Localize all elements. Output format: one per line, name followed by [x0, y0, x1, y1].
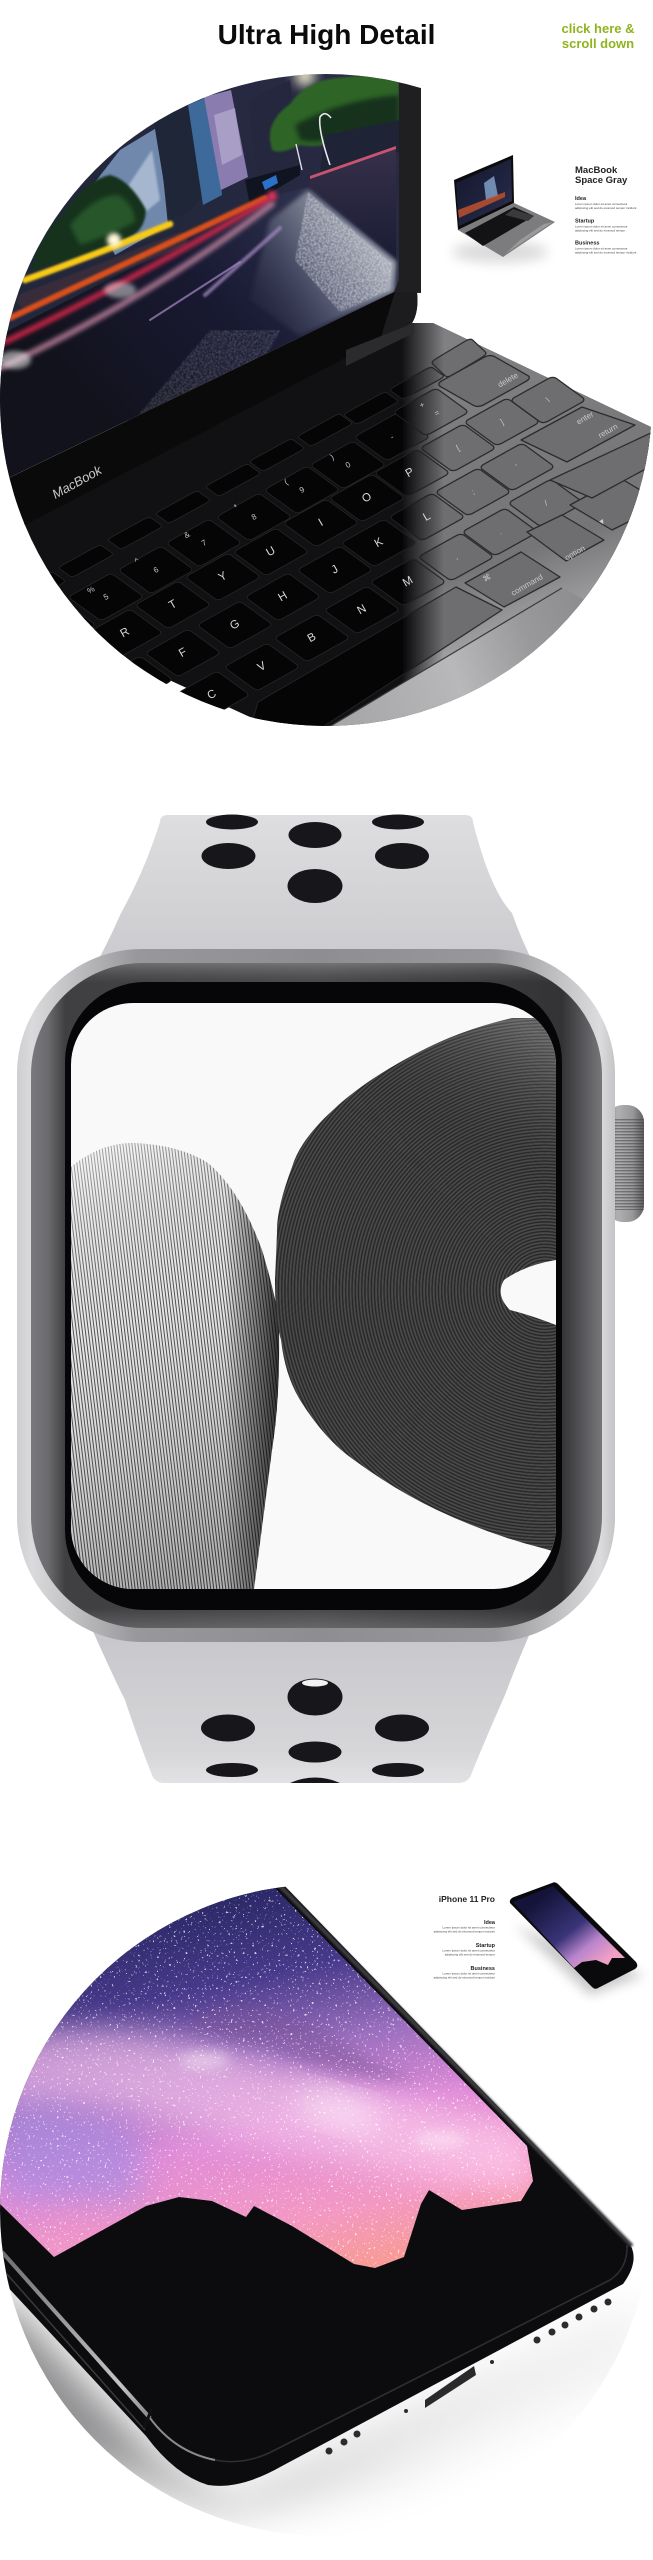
key labels: C [205, 688, 219, 702]
key labels: K [373, 536, 386, 550]
thumbnail phone body [510, 1882, 637, 1989]
key labels [86, 370, 619, 702]
watch screen [60, 1003, 560, 1600]
key labels: 9 [298, 485, 307, 495]
key labels: ] [499, 418, 505, 426]
feature: Startup [442, 1943, 496, 1956]
feature: Business [575, 240, 637, 254]
key labels: , [453, 553, 459, 561]
top strap [84, 814, 545, 985]
MacBook logo: MacBook [49, 462, 105, 502]
key labels: / [543, 498, 550, 507]
watch case outer [17, 949, 615, 1642]
key labels: % [86, 584, 96, 596]
feature: Business: adipiscing elit sed do eiusmod tempor incidunt [434, 1976, 495, 1980]
tree right [270, 72, 399, 152]
product thumbnail: iPhone [510, 1882, 645, 1995]
panel: iPhone close-up circle [0, 1860, 640, 2520]
key labels: ' [514, 462, 520, 471]
thumbnail shadow [515, 1925, 645, 1995]
key labels: ▼ [596, 516, 608, 528]
lamp posts [320, 114, 331, 165]
key labels: M [401, 574, 415, 590]
top edge bezel highlight [278, 1884, 632, 2246]
key labels: option [563, 544, 587, 562]
bottom strap [88, 1620, 536, 1783]
phone body [0, 1880, 634, 2486]
key labels: 7 [200, 538, 209, 548]
left sculpture [71, 1143, 280, 1589]
road [0, 187, 396, 482]
call to action: scroll down [562, 36, 634, 51]
lid right bezel [394, 60, 421, 293]
key labels: 5 [102, 592, 111, 602]
strap holes [201, 1678, 429, 1783]
key labels: command [510, 572, 544, 598]
key labels: & [182, 529, 192, 540]
key labels: G [228, 618, 242, 632]
title: Ultra High Detail [218, 19, 435, 50]
key labels: ⌘ [481, 572, 493, 584]
call to action [562, 21, 634, 51]
product thumbnail: MacBook [452, 155, 555, 263]
strap holes [202, 814, 429, 903]
starry sky wallpaper [0, 1888, 533, 2268]
antenna band [142, 2413, 150, 2428]
panel: MacBook close-up circle [0, 60, 653, 760]
key labels: L [421, 510, 433, 524]
thumbnail shadow [452, 241, 548, 263]
key labels: - [389, 432, 396, 442]
key labels: U [264, 545, 278, 559]
hinge [346, 326, 408, 366]
thumbnail wallpaper [513, 1886, 625, 1968]
feature: Idea: Idea [484, 1920, 496, 1926]
key labels: F [177, 646, 189, 660]
key labels: 0 [344, 460, 353, 470]
key labels: T [167, 598, 179, 612]
feature: Idea [575, 196, 637, 210]
key labels: + [418, 400, 427, 410]
feature: Business [434, 1966, 495, 1980]
key labels: . [497, 528, 503, 536]
product text: MacBook: Space Gray [575, 175, 628, 186]
wet road highlight [250, 190, 396, 336]
bottom frame lines [215, 2245, 627, 2462]
key labels: ; [470, 488, 476, 496]
black bezel [65, 982, 562, 1610]
thumbnail lid [454, 155, 514, 230]
product text: MacBook [575, 165, 637, 254]
key labels: ( [283, 477, 290, 487]
feature: Startup: Lorem ipsum dolor sit amet consectetur [575, 224, 628, 228]
thumbnail deck [458, 203, 555, 257]
key labels: B [306, 631, 319, 645]
feature: Startup: adipiscing elit sed do eiusmod tempor [445, 1952, 495, 1956]
keyboard deck dark layer [0, 323, 653, 747]
key labels: ) [329, 452, 336, 462]
lower speaker and port [326, 2298, 612, 2454]
key labels: P [404, 466, 417, 480]
feature: Business: Lorem ipsum dolor sit amet consectetur [442, 1972, 495, 1976]
key labels: [ [455, 443, 462, 452]
key labels: return [597, 422, 619, 440]
key labels: \ [545, 395, 552, 404]
key labels: V [256, 660, 269, 674]
key labels: J [330, 563, 340, 577]
key labels: = [433, 408, 442, 418]
product text: iPhone: iPhone 11 Pro [439, 1894, 495, 1904]
product text: iPhone [434, 1894, 496, 1980]
wall [308, 148, 396, 258]
tree left [30, 175, 146, 272]
feature: Startup: Startup [476, 1943, 496, 1949]
feature: Business: Lorem ipsum dolor sit amet consectetur [575, 246, 628, 250]
trackpad [331, 594, 584, 726]
screen photo: night city [0, 60, 400, 500]
key labels: enter [575, 409, 595, 426]
feature: Business: Business [471, 1966, 495, 1972]
watch case inner [31, 963, 602, 1628]
key labels: delete [496, 370, 520, 389]
key labels: ^ [133, 556, 141, 566]
feature: Business: adipiscing elit sed do eiusmod tempor incidunt [575, 250, 637, 254]
key labels: * [232, 502, 240, 512]
key labels: Y [217, 570, 230, 584]
lid chin [0, 292, 417, 540]
feature: Startup: Startup [575, 218, 595, 224]
feature: Idea: Idea [575, 196, 587, 202]
key labels: N [355, 603, 369, 617]
phone cast shadow [0, 2280, 640, 2520]
light trails [0, 198, 280, 368]
key labels: H [276, 590, 290, 604]
key labels: I [317, 517, 325, 529]
feature: Idea: Lorem ipsum dolor sit amet consectetur [575, 202, 628, 206]
keyboard deck reflected layer [404, 323, 651, 710]
key labels: 8 [250, 512, 259, 522]
key labels: O [360, 491, 374, 505]
right sculpture [275, 1018, 556, 1551]
key labels: 6 [152, 565, 161, 575]
call to action: click here & [562, 21, 634, 36]
feature: Idea: adipiscing elit sed do eiusmod tempor incidunt [434, 1930, 495, 1934]
side metal band [2, 2252, 150, 2418]
feature: Startup: Lorem ipsum dolor sit amet consectetur [442, 1948, 495, 1952]
key labels: R [118, 626, 132, 640]
feature: Business: Business [575, 240, 599, 246]
digital crown [596, 1105, 644, 1222]
panel: Apple Watch [17, 814, 644, 1783]
product text: MacBook: MacBook [575, 165, 618, 176]
feature: Idea [434, 1920, 496, 1934]
feature: Startup: adipiscing elit sed do eiusmod tempor [575, 228, 625, 232]
feature: Startup [575, 218, 628, 232]
feature: Idea: Lorem ipsum dolor sit amet consectetur [442, 1926, 495, 1930]
feature: Idea: adipiscing elit sed do eiusmod tempor incidunt [575, 206, 637, 210]
